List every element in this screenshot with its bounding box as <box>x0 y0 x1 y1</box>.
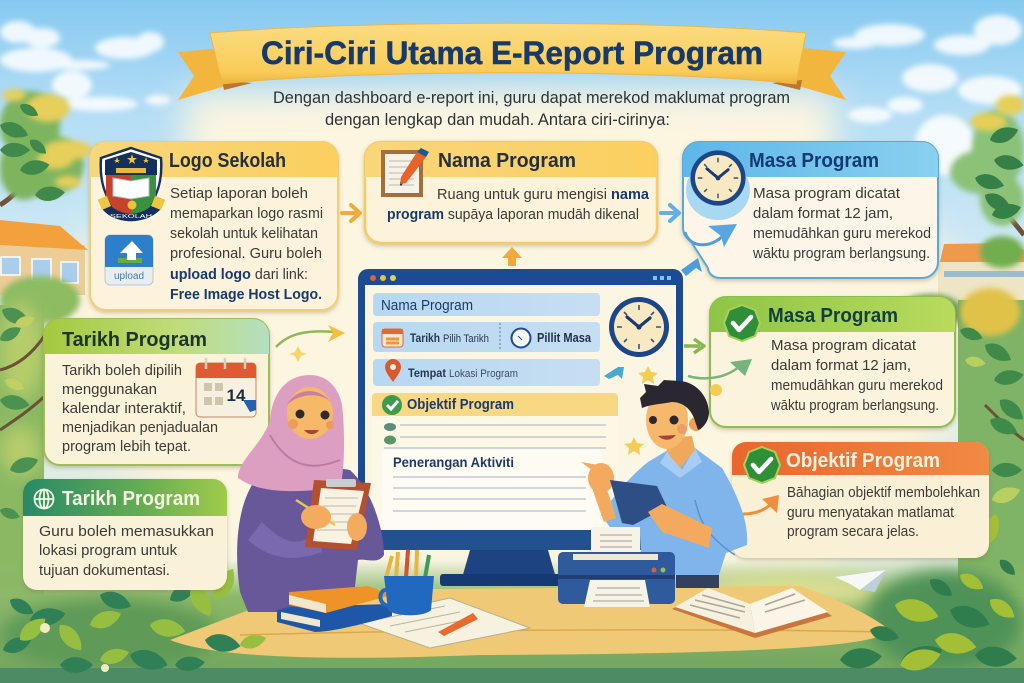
tablet <box>610 480 667 525</box>
school building, right <box>938 243 1024 300</box>
panel: penerangan aktiviti: Penerangan Aktiviti <box>393 454 514 470</box>
icon: clock <box>690 150 746 206</box>
heading: Nama Program <box>438 150 576 172</box>
icon: globe <box>34 490 54 508</box>
heading: Masa Program <box>749 150 879 172</box>
body text: Ruang untuk guru mengisi nama <box>437 186 650 203</box>
school building, left <box>0 220 88 324</box>
body text: Masa program dicatat <box>771 337 917 354</box>
intro paragraph: Dengan dashboard e-report ini, guru dapat merekod maklumat program <box>273 89 790 107</box>
body text: wāktu program berlangsung. <box>752 245 930 262</box>
open book <box>672 588 832 638</box>
body text: sekolah untuk kelihatan <box>170 225 318 242</box>
arrow <box>743 495 779 514</box>
title text: Ciri-Ciri Utama E-Report Program <box>261 35 763 71</box>
foliage, right side <box>896 288 1024 595</box>
body <box>237 462 384 612</box>
icon: upload badge: upload <box>114 271 144 282</box>
figure: teacher with hijab <box>237 375 384 612</box>
panel: Nama Program <box>365 142 657 243</box>
tree, top left <box>0 89 92 205</box>
heading: Tarikh Program <box>62 329 207 351</box>
icon: school shield <box>98 148 165 221</box>
field: nama program: Nama Program <box>381 298 473 314</box>
body text: program supāya laporan mudāh dikenal <box>387 206 639 223</box>
panel: Masa Program (green) <box>710 297 955 427</box>
body text: memudāhkan guru merekod <box>753 225 931 242</box>
body text: profesional. Guru boleh <box>170 245 322 262</box>
field: tarikh and masa: Pilih Tarikh <box>443 333 489 345</box>
body text: menjadikan penjadualan <box>62 419 218 436</box>
body text <box>387 186 650 223</box>
icon: calendar: 14 <box>227 386 246 405</box>
body text: Setiap laporan boleh <box>170 185 308 202</box>
arrow: green curve <box>688 359 752 378</box>
shirt <box>601 448 747 575</box>
arrow <box>685 224 737 247</box>
ground and bottom foliage <box>0 560 1024 683</box>
body text <box>787 484 980 540</box>
body text: Tarikh boleh dipilih <box>62 362 182 379</box>
heading: Logo Sekolah <box>169 150 286 172</box>
icon: notepad and pencil <box>381 148 429 197</box>
body text: Masa program dicatat <box>753 185 901 202</box>
printer <box>558 527 675 607</box>
body text: kalendar interaktif, <box>62 400 186 417</box>
books <box>277 586 392 632</box>
panel: objektif form <box>372 393 618 530</box>
intro paragraph: dengan lengkap dan mudah. Antara ciri-cirinya: <box>325 111 670 129</box>
arrow: green to masa <box>684 339 704 353</box>
body text: memudāhkan guru merekod <box>771 377 943 394</box>
panel: Masa Program (blue) <box>683 142 938 278</box>
icon: calendar <box>196 358 256 417</box>
panel: Objektif Program <box>732 442 989 558</box>
panel: Tarikh Program (location) <box>23 479 227 590</box>
figure: teacher with tablet <box>581 380 747 588</box>
forearm and hand <box>648 504 712 548</box>
panel: objektif form: Objektif Program <box>407 397 514 413</box>
body text <box>170 185 323 303</box>
body text: dalam format 12 jam, <box>753 205 893 222</box>
intro paragraph <box>273 89 790 129</box>
body text <box>62 362 218 455</box>
body text <box>39 523 214 579</box>
body text: wāktu program berlangsung. <box>770 397 939 414</box>
window bar <box>370 275 671 281</box>
tree, top right <box>950 95 1024 268</box>
body text <box>770 337 943 414</box>
arrow: tarikh to monitor <box>276 325 345 362</box>
body text: Guru boleh memasukkan <box>39 523 214 540</box>
field: tarikh and masa: Pillit Masa <box>537 330 592 345</box>
body text: memaparkan logo rasmi <box>170 205 323 222</box>
panel: penerangan aktiviti <box>382 450 602 530</box>
pointing hand <box>590 470 616 522</box>
arrow: monitor to masa <box>681 258 702 276</box>
hijab <box>238 375 344 491</box>
panel: Tarikh Program (calendar) <box>44 319 269 465</box>
stars <box>624 366 722 455</box>
neck <box>665 436 695 468</box>
leaves, bottom left <box>1 565 268 674</box>
central cream wash <box>42 115 982 565</box>
trousers <box>676 575 719 588</box>
clipboard <box>305 480 371 550</box>
body text: tujuan dokumentasi. <box>39 562 170 579</box>
face <box>287 387 333 439</box>
body text: program secara jelas. <box>787 523 919 540</box>
heading: Objektif Program <box>786 450 940 472</box>
field: tempat: Lokasi Program <box>449 368 518 380</box>
icon: school shield: SEKOLAH <box>110 214 153 220</box>
stand <box>440 550 575 586</box>
body text: program lebih tepat. <box>62 438 191 455</box>
body text: Free Image Host Logo. <box>170 286 322 303</box>
icon: upload badge <box>105 235 153 285</box>
arrow: teal <box>604 367 624 379</box>
icon: check badge <box>724 305 760 341</box>
wooden table <box>170 586 890 658</box>
arrow: nama to monitor <box>502 247 522 266</box>
foliage, left side <box>0 302 46 595</box>
paper plane <box>835 570 886 592</box>
mug and pencils <box>380 550 434 615</box>
body text: menggunakan <box>62 381 157 398</box>
heading: Masa Program <box>768 305 898 327</box>
papers and pencil on desk <box>350 598 530 648</box>
panel: Logo Sekolah <box>90 142 338 310</box>
body text: Bāhagian objektif membolehkan <box>787 484 980 501</box>
heading: Tarikh Program <box>62 488 200 510</box>
title ribbon <box>178 23 846 100</box>
body text: dalam format 12 jam, <box>771 357 911 374</box>
body text <box>752 185 931 262</box>
body text: upload logo dari link: <box>170 266 308 283</box>
hands and pen <box>296 500 335 525</box>
leaves, bottom right <box>839 511 1019 675</box>
field: tempat <box>373 359 600 386</box>
field: tarikh and masa <box>373 322 600 352</box>
monitor <box>358 269 683 586</box>
body text: lokasi program untuk <box>39 542 177 559</box>
head <box>646 391 688 449</box>
field: tarikh and masa: Tarikh <box>410 331 440 345</box>
arrow: nama to masa <box>661 205 679 221</box>
icon: wall clock <box>609 297 669 357</box>
field: nama program <box>373 293 600 316</box>
icon: check badge <box>744 447 780 483</box>
arrow: logo to nama <box>342 205 360 221</box>
body text: guru menyatakan matlamat <box>787 504 955 521</box>
field: tempat: Tempat <box>408 366 446 380</box>
